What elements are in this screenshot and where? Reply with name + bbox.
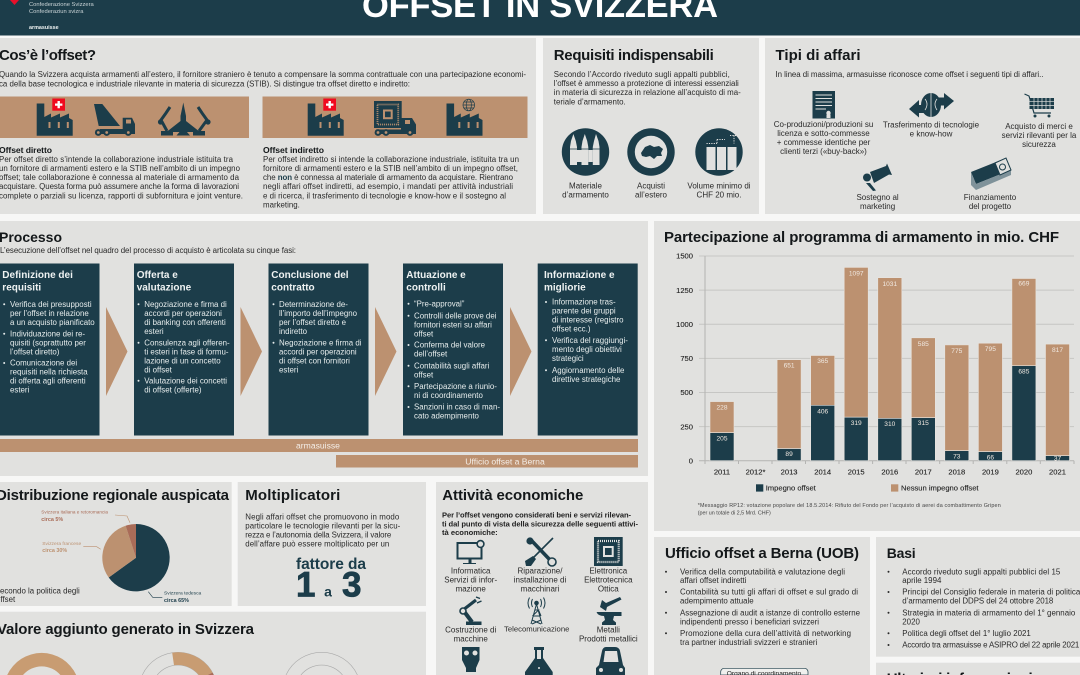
step 2: ti esteri in fase di formu- [144, 347, 229, 356]
intro bold: ti dal punto di vista della sicurezza delle seguenti attivi- [442, 519, 638, 528]
panel: cos'è l'offset [0, 38, 536, 214]
icon: megaphone [863, 164, 892, 191]
label elettronica [584, 566, 633, 593]
step 5: parente dei gruppi [552, 307, 616, 316]
icon: flask [525, 647, 553, 675]
label co-produzioni: licenza e sotto-commesse [777, 129, 870, 138]
bars: impegno offset [710, 366, 1070, 461]
step 2: di offset (offerte) [144, 385, 202, 394]
y axis labels: 500 [680, 388, 693, 397]
swiss shield logo [10, 0, 19, 5]
offset diretto text: Per offset diretto s’intende la collaborazione industriale istituita tra [0, 155, 234, 164]
label sostegno: marketing [860, 202, 895, 211]
slice labels: circa 30% [42, 548, 67, 554]
description: Negli affari offset che promuovono in modo [245, 512, 400, 522]
step 1: requisiti nella richiesta [10, 368, 88, 377]
bullet list: Accordo tra armasuisse e ASIPRO del 22 aprile 2021 [902, 641, 1079, 650]
description: teriale d’armamento. [554, 97, 626, 106]
step 2: Negoziazione e firma di [144, 300, 227, 309]
factor callout: 1 [296, 566, 315, 605]
value labels: 651 [784, 362, 795, 369]
description: Secondo l’Accordo riveduto sugli appalti pubblici, [554, 70, 730, 79]
offset diretto text: acquistare. Questa forma può assumere anche la forma di lavorazioni [0, 182, 239, 191]
x axis labels: 2016 [881, 468, 898, 476]
step 2: Consulenza agli offeren- [144, 338, 230, 347]
donut 3 [286, 652, 357, 675]
step 1 [0, 264, 100, 436]
offset diretto text: offset; tale collaborazione è connessa al materiale di armamento da [0, 173, 240, 182]
labels: CHF 20 mio. [697, 190, 741, 200]
icon: anvil and hammer [596, 597, 622, 625]
bar chart [676, 252, 1074, 476]
offset indiretto text: fornitore di armamenti estero e la STIB nell’ambito di un impegno offset, [263, 164, 518, 173]
labels: Materiale [569, 182, 602, 190]
label elettronica: Elettronica [589, 566, 628, 575]
slice labels: circa 65% [164, 598, 189, 604]
footnote [698, 503, 1001, 516]
label co-produzioni: + commesse identiche per [777, 138, 871, 147]
value labels: 73 [953, 454, 961, 461]
step 4: fornitori esteri su affari [414, 320, 492, 329]
label finanziamento: Finanziamento [964, 193, 1017, 202]
label telecomunicazione: Telecomunicazione [504, 625, 569, 634]
icon: ammunition [562, 128, 609, 176]
bullet list: tra partner industriali svizzeri e stranieri [680, 638, 818, 647]
description: l’offset è ammesso a protezione di interessi essenziali [554, 79, 739, 88]
bullet list: aprile 1994 [902, 576, 942, 585]
panel: tipi di affari [765, 38, 1080, 214]
step 5: direttive strategiche [552, 375, 621, 384]
factor callout [296, 556, 366, 605]
arrow 4 [510, 307, 532, 396]
y axis labels: 750 [680, 354, 693, 363]
factor callout: 3 [342, 566, 361, 605]
heading: Tipi di affari [776, 47, 860, 64]
offset indiretto text: negli affari offset indiretti, ad esempio, i mandati per attività industriali [263, 182, 513, 191]
slice labels: Svizzera italiana e retoromancia [41, 510, 108, 515]
y axis labels: 0 [689, 456, 693, 465]
icon: gas mask [462, 647, 480, 672]
label riparazione [514, 566, 566, 593]
note [0, 586, 80, 604]
value labels: 775 [951, 348, 963, 355]
value labels: 406 [817, 408, 829, 416]
legend [756, 484, 979, 492]
step 4: “Pre-approval” [414, 299, 465, 308]
step 5: Verifica del raggiungi- [552, 336, 628, 345]
arrow 3 [375, 307, 396, 396]
labels [562, 182, 751, 200]
step 3 [268, 264, 368, 436]
panel: ufficio offset a berna [654, 537, 870, 675]
x axis labels: 2021 [1049, 468, 1066, 476]
icon: circuit chip [594, 537, 623, 566]
slice labels: Svizzera tedesca [164, 591, 202, 597]
step 4: Controlli delle prove dei [414, 311, 497, 320]
panel: basi [876, 537, 1080, 657]
label finanziamento: del progetto [969, 202, 1012, 211]
header band [0, 0, 1080, 36]
step 4: offset [414, 329, 434, 338]
step 1: a un acquisto pianificato [10, 318, 95, 327]
label acquisto: sicurezza [1022, 140, 1056, 149]
icon: robot arm [460, 597, 482, 625]
heading: Attività economiche [442, 487, 583, 504]
value labels: 37 [1054, 456, 1061, 462]
intro text: ca della base tecnologica e industriale rilevante in materia di sicurezza (STIB). Si distingue tra offset diretto e indiretto: [0, 79, 410, 88]
heading: Ufficio offset a Berna (UOB) [665, 545, 859, 562]
label riparazione: Riparazione/ [518, 566, 563, 575]
icon: telecom tower [528, 598, 545, 624]
x axis labels: 2012* [746, 468, 765, 476]
step 5: di interesse (registro [552, 316, 624, 325]
confederation text: Confederazione Svizzera [29, 2, 95, 8]
step 4: Conferma del valore [414, 341, 486, 350]
value labels: 228 [716, 404, 728, 411]
value labels: 817 [1052, 347, 1063, 354]
step 1: Comunicazione dei [10, 359, 77, 368]
confederation text: Confederaziun svizra [29, 9, 84, 15]
step 4: controlli [406, 282, 446, 294]
step 1: requisiti [2, 282, 41, 294]
label trasferimento: e know-how [910, 130, 953, 139]
value labels: 585 [918, 341, 929, 348]
value labels: 669 [1018, 280, 1030, 288]
step 2: esteri [144, 327, 164, 336]
y axis labels: 1250 [676, 286, 693, 295]
step 1: Definizione dei [2, 270, 73, 281]
step 3: Conclusione del [271, 270, 349, 281]
label informatica [444, 566, 497, 593]
intro bold [442, 510, 638, 537]
bullet list: Accordo riveduto sugli appalti pubblici del 15 [902, 567, 1061, 576]
label riparazione: macchinari [521, 584, 560, 593]
description: in materia di sicurezza in relazione all’acquisto di ma- [554, 88, 741, 97]
step 1: di offerta agli offerenti [10, 377, 86, 386]
step 3: ll’importo dell’impegno [279, 309, 358, 318]
step 4: offset [414, 370, 434, 379]
y axis labels: 1000 [676, 320, 693, 329]
confederation text: armasuisse [29, 25, 59, 31]
step 2: di offset [144, 365, 173, 374]
x axis labels: 2017 [915, 468, 932, 476]
value labels: 315 [918, 420, 929, 427]
icon: volume columns [695, 128, 743, 176]
panel: requisiti indispensabili [543, 38, 759, 214]
intro text: Quando la Svizzera acquista armamenti all’estero, il fornitore straniero è tenuto a compensare la somma contrattuale con una partecipazione economi- [0, 70, 526, 79]
heading: Processo [0, 229, 62, 245]
heading: Cos’è l’offset? [0, 47, 96, 64]
heading: Valore aggiunto generato in Svizzera [0, 621, 255, 638]
icon: banknotes [971, 158, 1011, 190]
label costruzione: macchine [454, 635, 488, 644]
panel: distribuzione regionale [0, 482, 232, 606]
step 5: offset ecc.) [552, 325, 591, 334]
step 5: Informazione e [544, 270, 615, 281]
step 4: cato adempimento [414, 412, 480, 421]
icon: shopping cart [1024, 94, 1054, 118]
step 5: migliorie [544, 282, 586, 294]
footnote: (per un totale di 2,5 Mrd. CHF) [698, 510, 771, 516]
bullet list: Principi del Consiglio federale in materia di politica [902, 588, 1080, 597]
step 1: per l’offset in relazione [10, 309, 89, 318]
description [245, 512, 401, 549]
icon: swiss factory [308, 98, 344, 136]
panel: ulteriori informazioni [876, 663, 1080, 675]
heading: Distribuzione regionale auspicata [0, 487, 230, 504]
label costruzione: Costruzione di [445, 626, 496, 635]
step 5: mento degli obiettivi [552, 345, 622, 354]
label costruzione [445, 626, 496, 644]
labels: Acquisti [637, 182, 665, 190]
coordination box [721, 668, 808, 675]
bars: nessun impegno [710, 267, 1070, 456]
arrow 2 [240, 307, 262, 396]
label co-produzioni: clienti terzi («buy-back») [780, 147, 867, 156]
offset diretto text: complete o parziali su licenza, rapporti di subfornitura e joint venture. [0, 191, 243, 200]
panel: valore aggiunto [0, 612, 426, 675]
step 5: strategici [552, 354, 584, 363]
description: dell’affare può essere moltiplicato per un [245, 540, 389, 549]
step 2: lazione di un concetto [144, 356, 221, 365]
step 2: di banking con offerenti [144, 318, 226, 327]
step 1: Verifica dei presupposti [10, 300, 92, 309]
label elettronica: Ottica [598, 584, 619, 593]
bullet list: adempimento attuale [680, 597, 754, 606]
icon: truck carrying aircraft tail [94, 104, 135, 136]
y axis labels [676, 252, 693, 465]
step 4: Sanzioni in caso di man- [414, 403, 500, 412]
offset indiretto text [263, 145, 519, 209]
label co-produzioni: Co-produzioni/produzioni su [774, 120, 873, 129]
icon: foreign factory with globe [446, 99, 482, 136]
bar: ufficio offset: Ufficio offset a Berna [465, 456, 545, 466]
description [554, 70, 741, 106]
value labels: 795 [985, 346, 996, 353]
bullet list [665, 567, 861, 647]
label finanziamento [964, 193, 1017, 211]
offset diretto text: Offset diretto [0, 145, 52, 155]
slice labels [41, 510, 202, 604]
step 4: Attuazione e [406, 270, 466, 281]
label elettronica: Elettrotecnica [584, 575, 633, 584]
label informatica: Servizi di infor- [444, 575, 497, 584]
y axis labels: 1500 [676, 252, 693, 261]
offset diretto text: un fornitore di armamenti estero e la STIB nell’ambito di un impegno [0, 164, 241, 173]
label informatica: Informatica [451, 566, 491, 575]
step 3: indiretto [279, 327, 308, 336]
value labels [716, 270, 1063, 462]
labels: all’estero [635, 190, 668, 200]
step 3: Determinazione de- [279, 300, 348, 309]
x axis labels: 2019 [982, 468, 999, 476]
donut 2 [142, 652, 214, 675]
panel: partecipazione chart [654, 221, 1080, 531]
step 3: di offset con fornitori [279, 356, 350, 365]
label trasferimento: Trasferimento di tecnologie [883, 121, 980, 130]
panel: moltiplicatori [238, 482, 426, 606]
intro bold: tà economiche: [442, 528, 498, 537]
bar: armasuisse [0, 439, 638, 452]
arrow 1 [106, 307, 128, 396]
description: rezza e l’autonomia della Svizzera, il valore [245, 531, 392, 540]
bullet list: 2020 [902, 617, 920, 626]
step 1: l’offset diretto) [10, 347, 60, 356]
step 3: per l’offset diretto e [279, 318, 347, 327]
offset indiretto text: che non è connessa al materiale di armamento da acquistare. Rientrano [263, 173, 514, 182]
icon: monitor [458, 541, 484, 564]
label metalli [579, 626, 638, 644]
icon: brain with arrows [909, 93, 954, 118]
bullet list: Politica degli offset del 1° luglio 2021 [902, 629, 1031, 638]
value labels: 1097 [849, 270, 864, 278]
label metalli: Metalli [597, 626, 620, 635]
x axis labels: 2018 [948, 468, 965, 476]
value labels: 1031 [882, 281, 897, 288]
value labels: 310 [884, 421, 896, 428]
value labels: 365 [817, 358, 829, 365]
step 2 [134, 264, 234, 436]
x axis labels [714, 468, 1066, 476]
label trasferimento [883, 121, 980, 139]
slice labels: circa 5% [41, 517, 63, 523]
step 2: valutazione [137, 282, 192, 294]
bullet list [888, 567, 1080, 650]
step 3: esteri [279, 365, 299, 374]
step 2: accordi per operazioni [144, 309, 222, 318]
panel: processo [0, 221, 648, 476]
legend: Impegno offset [766, 484, 817, 492]
icon: swiss factory [37, 98, 73, 136]
leader lines [83, 515, 162, 597]
step 1: esteri [10, 385, 30, 394]
step 3: accordi per operazioni [279, 347, 357, 356]
intro text [0, 70, 526, 88]
offset diretto text [0, 145, 243, 200]
offset indiretto text: marketing. [263, 200, 300, 209]
label informatica: mazione [456, 584, 486, 593]
factor callout: fattore da [296, 556, 366, 573]
x axis labels: 2013 [781, 468, 798, 476]
icon: jet with robot arms [158, 102, 211, 136]
bullet list: Promozione della cura dell’attività di networking [680, 629, 851, 638]
label sostegno [856, 193, 899, 211]
heading: Basi [887, 545, 916, 561]
bar: armasuisse: armasuisse [296, 440, 340, 450]
label acquisto [1002, 122, 1077, 149]
icon: switzerland map [627, 128, 675, 176]
icon: tools [525, 537, 556, 566]
bullet list: Contabilità su tutti gli affari di offset e sul grado di [680, 588, 858, 597]
label co-produzioni [774, 120, 873, 156]
legend: Nessun impegno offset [901, 484, 979, 492]
x axis labels: 2020 [1015, 468, 1032, 476]
label acquisto: servizi rilevanti per la [1002, 131, 1077, 140]
offset indiretto text: e di ricerca, il trasferimento di tecnologie e know-how e il sostegno al [263, 191, 506, 200]
label acquisto: Acquisto di merci e [1005, 122, 1073, 131]
icon: truck carrying chip [374, 101, 416, 136]
bullet list: Verifica della computabilità e valutazione degli [680, 567, 845, 576]
panel: attività economiche [436, 482, 648, 675]
bullet list: indipendenti presso i beneficiari svizzeri [680, 617, 819, 626]
band: offset diretto icons [0, 96, 249, 138]
step 4: ni di coordinamento [414, 391, 483, 400]
bullet list: d’armamento del DDPS del 24 ottobre 2018 [902, 597, 1054, 606]
value labels: 66 [987, 454, 994, 462]
heading: Partecipazione al programma di armamento in mio. CHF [664, 229, 1059, 246]
label metalli: Prodotti metallici [579, 635, 638, 644]
icon: licence document [812, 91, 835, 118]
donut 1 [7, 653, 76, 675]
y axis labels: 250 [680, 422, 693, 431]
subtitle: L’esecuzione dell’offset nel quadro del processo di acquisto è articolata su cinque fasi: [0, 246, 296, 255]
step 4 [403, 264, 503, 436]
labels: d’armamento [562, 190, 609, 200]
step 5: Informazione tras- [552, 298, 616, 307]
bullet list: Strategia in materia di armamento del 1° gennaio [902, 608, 1076, 617]
step 4: Contabilità sugli affari [414, 361, 490, 370]
step 2: Valutazione dei concetti [144, 376, 227, 385]
footnote: *Messaggio RP12: votazione popolare del 18.5.2014: Rifiuto del Fondo per l’acquisto di aerei da combattimento Gripen [698, 503, 1001, 509]
bar: ufficio offset [336, 455, 638, 468]
step 3: contratto [271, 282, 315, 294]
x axis labels: 2011 [714, 468, 730, 476]
x axis labels: 2015 [848, 468, 865, 476]
label riparazione: installazione di [514, 575, 566, 584]
description: particolare le tecnologie rilevanti per la sicu- [245, 522, 401, 531]
value labels: 319 [851, 420, 862, 427]
heading: Moltiplicatori [245, 487, 340, 504]
bullet list: affari offset indiretti [680, 576, 747, 585]
labels: Volume minimo di [687, 182, 751, 190]
intro: In linea di massima, armasuisse riconosce come offset i seguenti tipi di affari.. [776, 70, 1044, 79]
heading: Requisiti indispensabili [554, 47, 714, 64]
step 5 [538, 264, 638, 436]
band: offset indiretto icons [262, 96, 528, 138]
step 1: Individuazione dei re- [10, 329, 85, 338]
offset indiretto text: Per offset indiretto si intende la collaborazione industriale, istituita tra un [263, 155, 519, 164]
step 3: Negoziazione e firma di [279, 338, 362, 347]
step 4: Partecipazione a riunio- [414, 382, 497, 391]
step 2: Offerta e [137, 270, 178, 281]
value labels: 89 [785, 451, 793, 458]
value labels: 205 [716, 436, 728, 442]
step 1: quisiti (soprattutto per [10, 338, 86, 348]
bullet list: Assegnazione di audit a istanze di controllo esterne [680, 608, 861, 617]
pie chart [102, 524, 170, 591]
label sostegno: Sostegno al [856, 193, 899, 202]
offset indiretto text: Offset indiretto [263, 145, 324, 155]
step 4: dell’offset [414, 350, 448, 359]
x axis labels: 2014 [814, 468, 831, 476]
step 5: Aggiornamento delle [552, 366, 625, 375]
icon: car [596, 647, 625, 675]
factor callout: a [324, 584, 332, 600]
confederation text [29, 2, 95, 31]
intro bold: Per l’offset vengono considerati beni e servizi rilevan- [442, 510, 631, 520]
slice labels: Svizzera francese [42, 541, 81, 547]
value labels: 685 [1018, 368, 1030, 376]
